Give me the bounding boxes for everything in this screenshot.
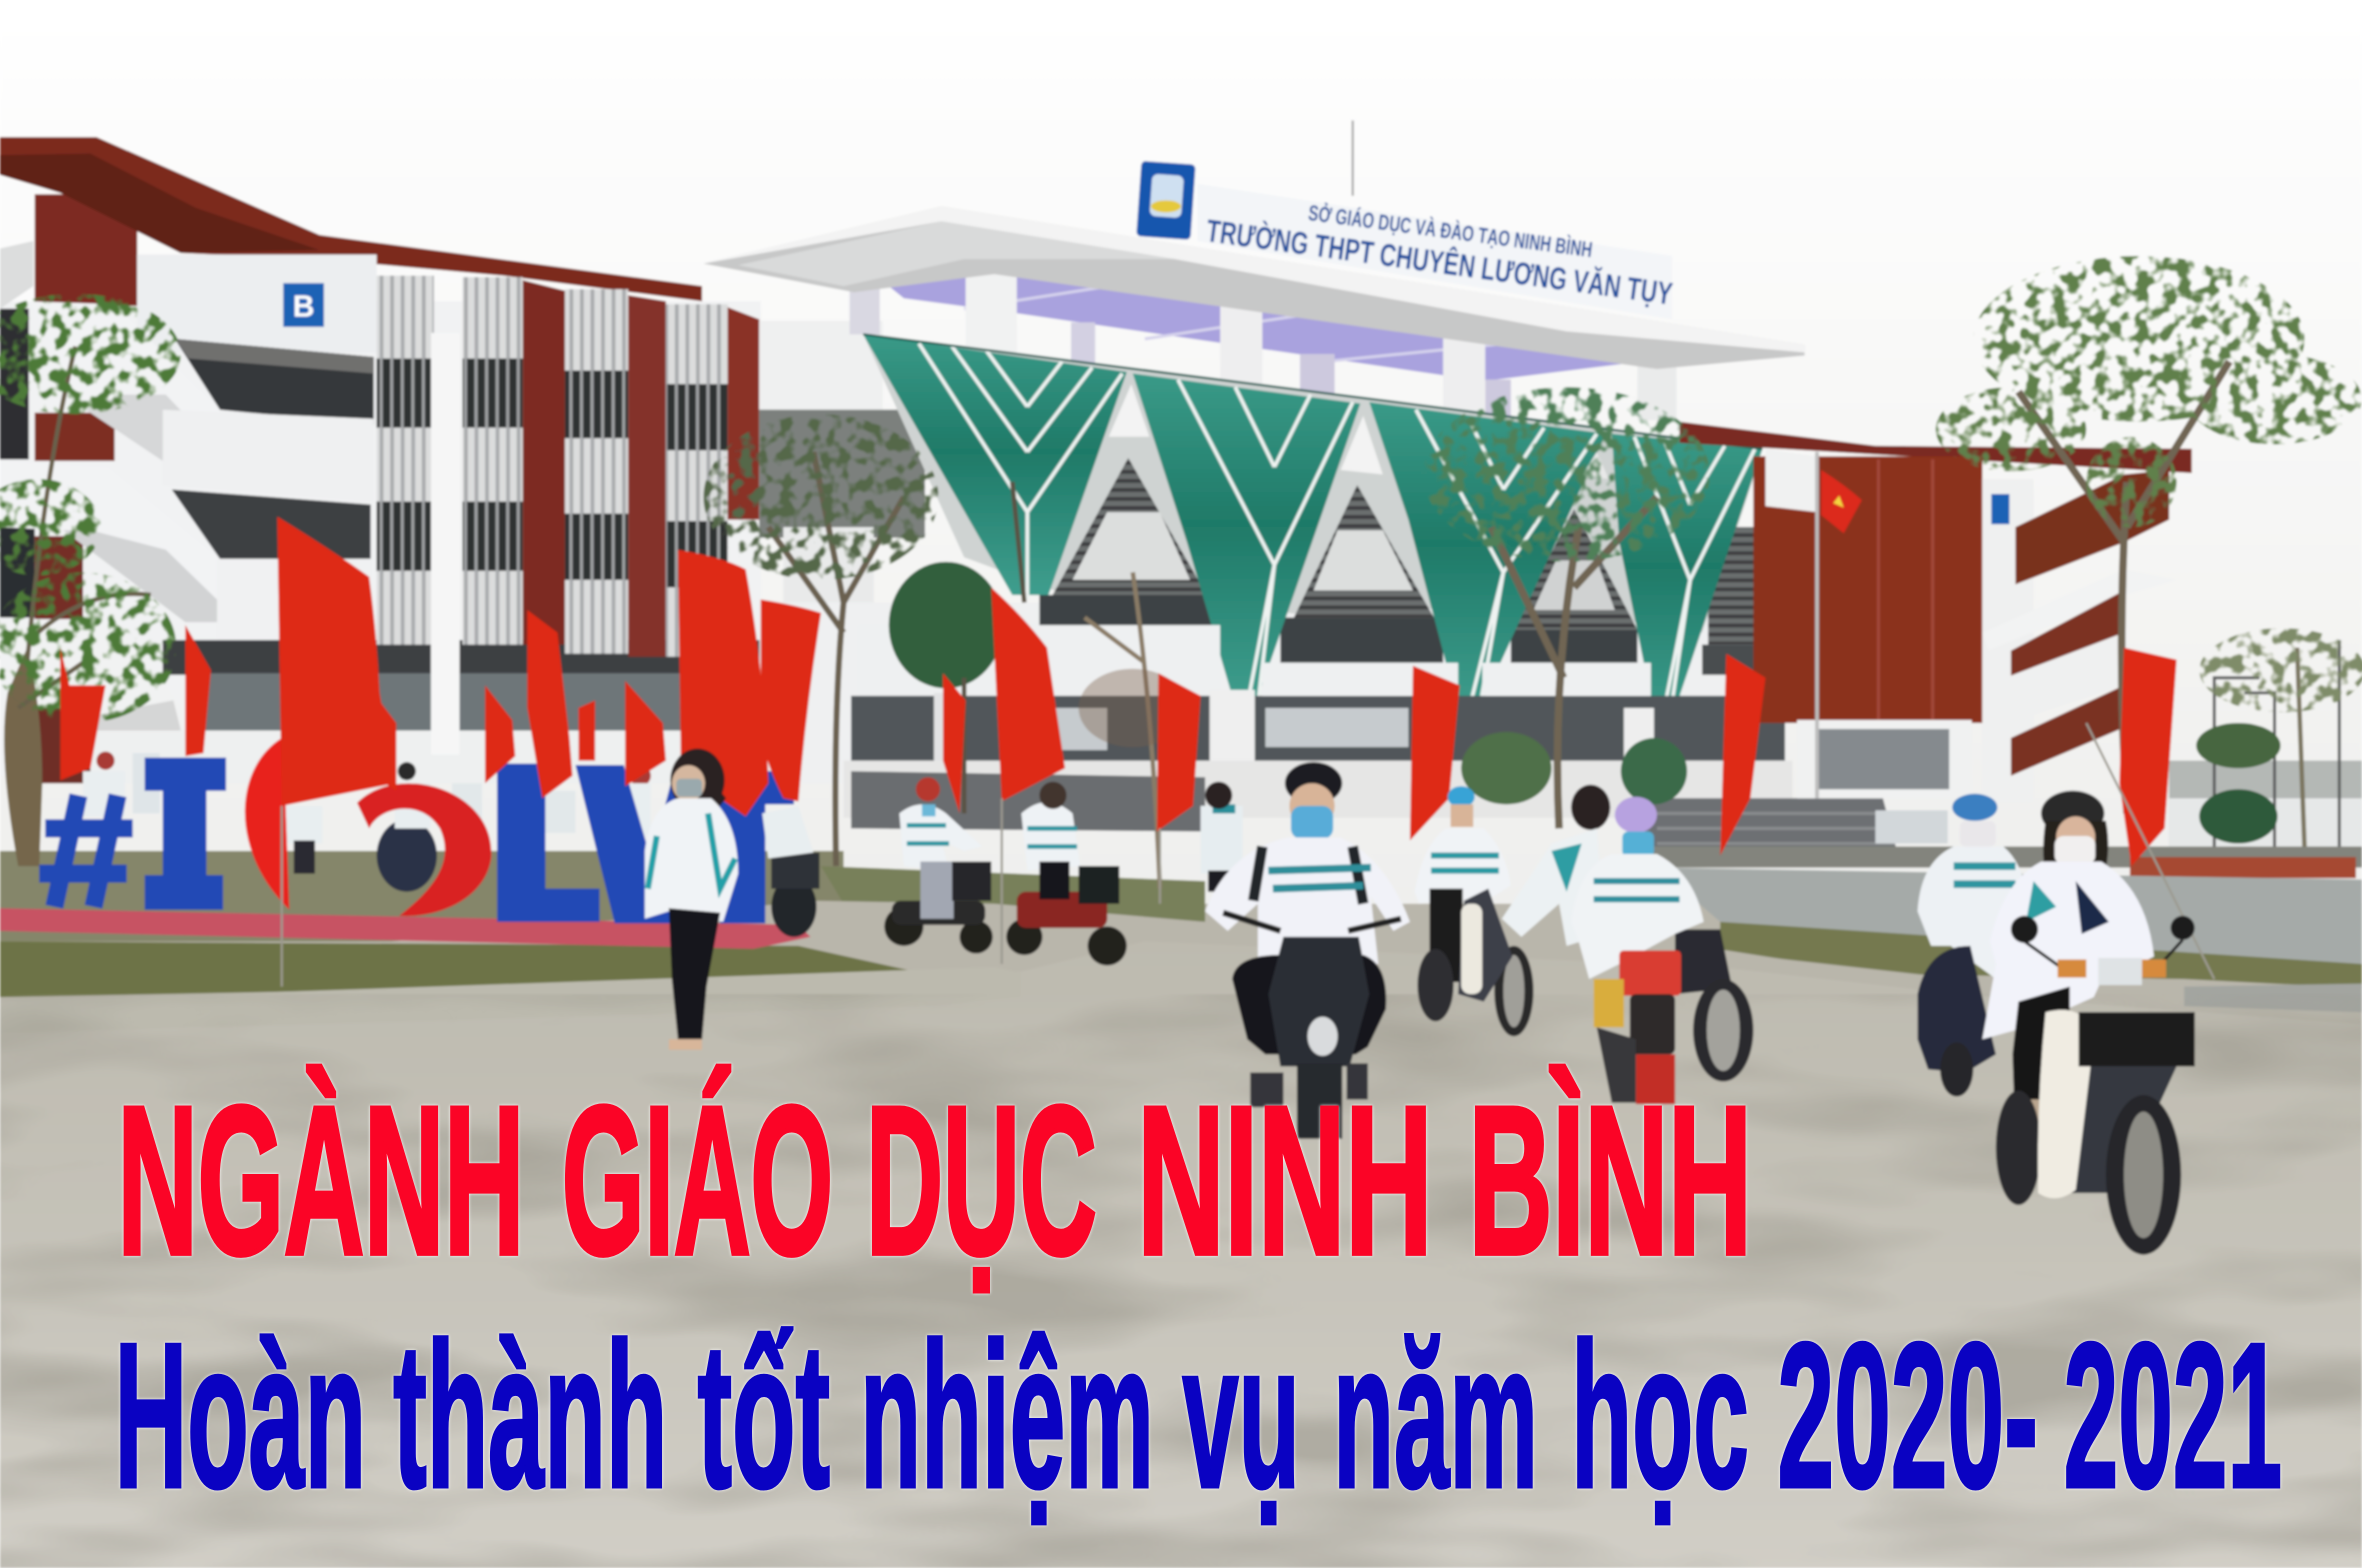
main title line 2: nhiệm [860,1300,1154,1531]
school sign [1136,120,1675,319]
main title line 1: BÌNH [1469,1062,1752,1298]
right background rider [1918,794,2026,1097]
red banner flags [60,517,2177,866]
school sign: TRƯỜNG THPT CHUYÊN LƯƠNG VĂN TỤY [1204,212,1675,312]
building: left wing [0,137,925,783]
main title line 2: học [1571,1300,1749,1531]
building: right wing [1680,422,2192,803]
school sign: SỞ GIÁO DỤC VÀ ĐÀO TẠO NINH BÌNH [1307,200,1594,262]
main title line 1: NGÀNH [118,1062,524,1298]
rider with purple helmet and red basket [1502,785,1753,1104]
main title line 2: tốt [697,1300,830,1531]
trees along the facade [704,256,2362,889]
student walking on the left [645,749,738,1050]
main title line 1: NINH [1137,1062,1433,1298]
main title line 2: thành [393,1300,667,1531]
main title line 2: vụ [1183,1300,1300,1531]
flag poles [282,723,2214,987]
main title line 2: 2020- [1777,1300,2038,1531]
glass facade [863,334,1777,728]
paving, lawn and plaza [0,847,2362,1568]
main title line 2 [115,1300,2282,1531]
block B sign [283,283,324,327]
main title line 2: Hoàn [115,1300,366,1531]
base ground fill [0,904,2362,1568]
background students [83,752,1948,892]
sky [0,0,2362,904]
main title line 1: DỤC [866,1062,1097,1298]
main title line 2: năm [1333,1300,1538,1531]
rider with backpack at centre [1205,762,1410,1139]
distant hills and lamp posts on the right [2169,628,2362,851]
block B sign: B [293,290,314,323]
main title line 1 [118,1062,1752,1298]
main title line 1: GIÁO [562,1062,833,1298]
left tree [0,294,181,866]
foreground rider on right [1982,791,2195,1255]
building: central entrance with canopy and glass [704,120,1901,866]
#ILVT letter sculpture [0,738,810,949]
scooter riders in the middle distance [762,777,1127,966]
rider with blue helmet [1414,786,1533,1036]
